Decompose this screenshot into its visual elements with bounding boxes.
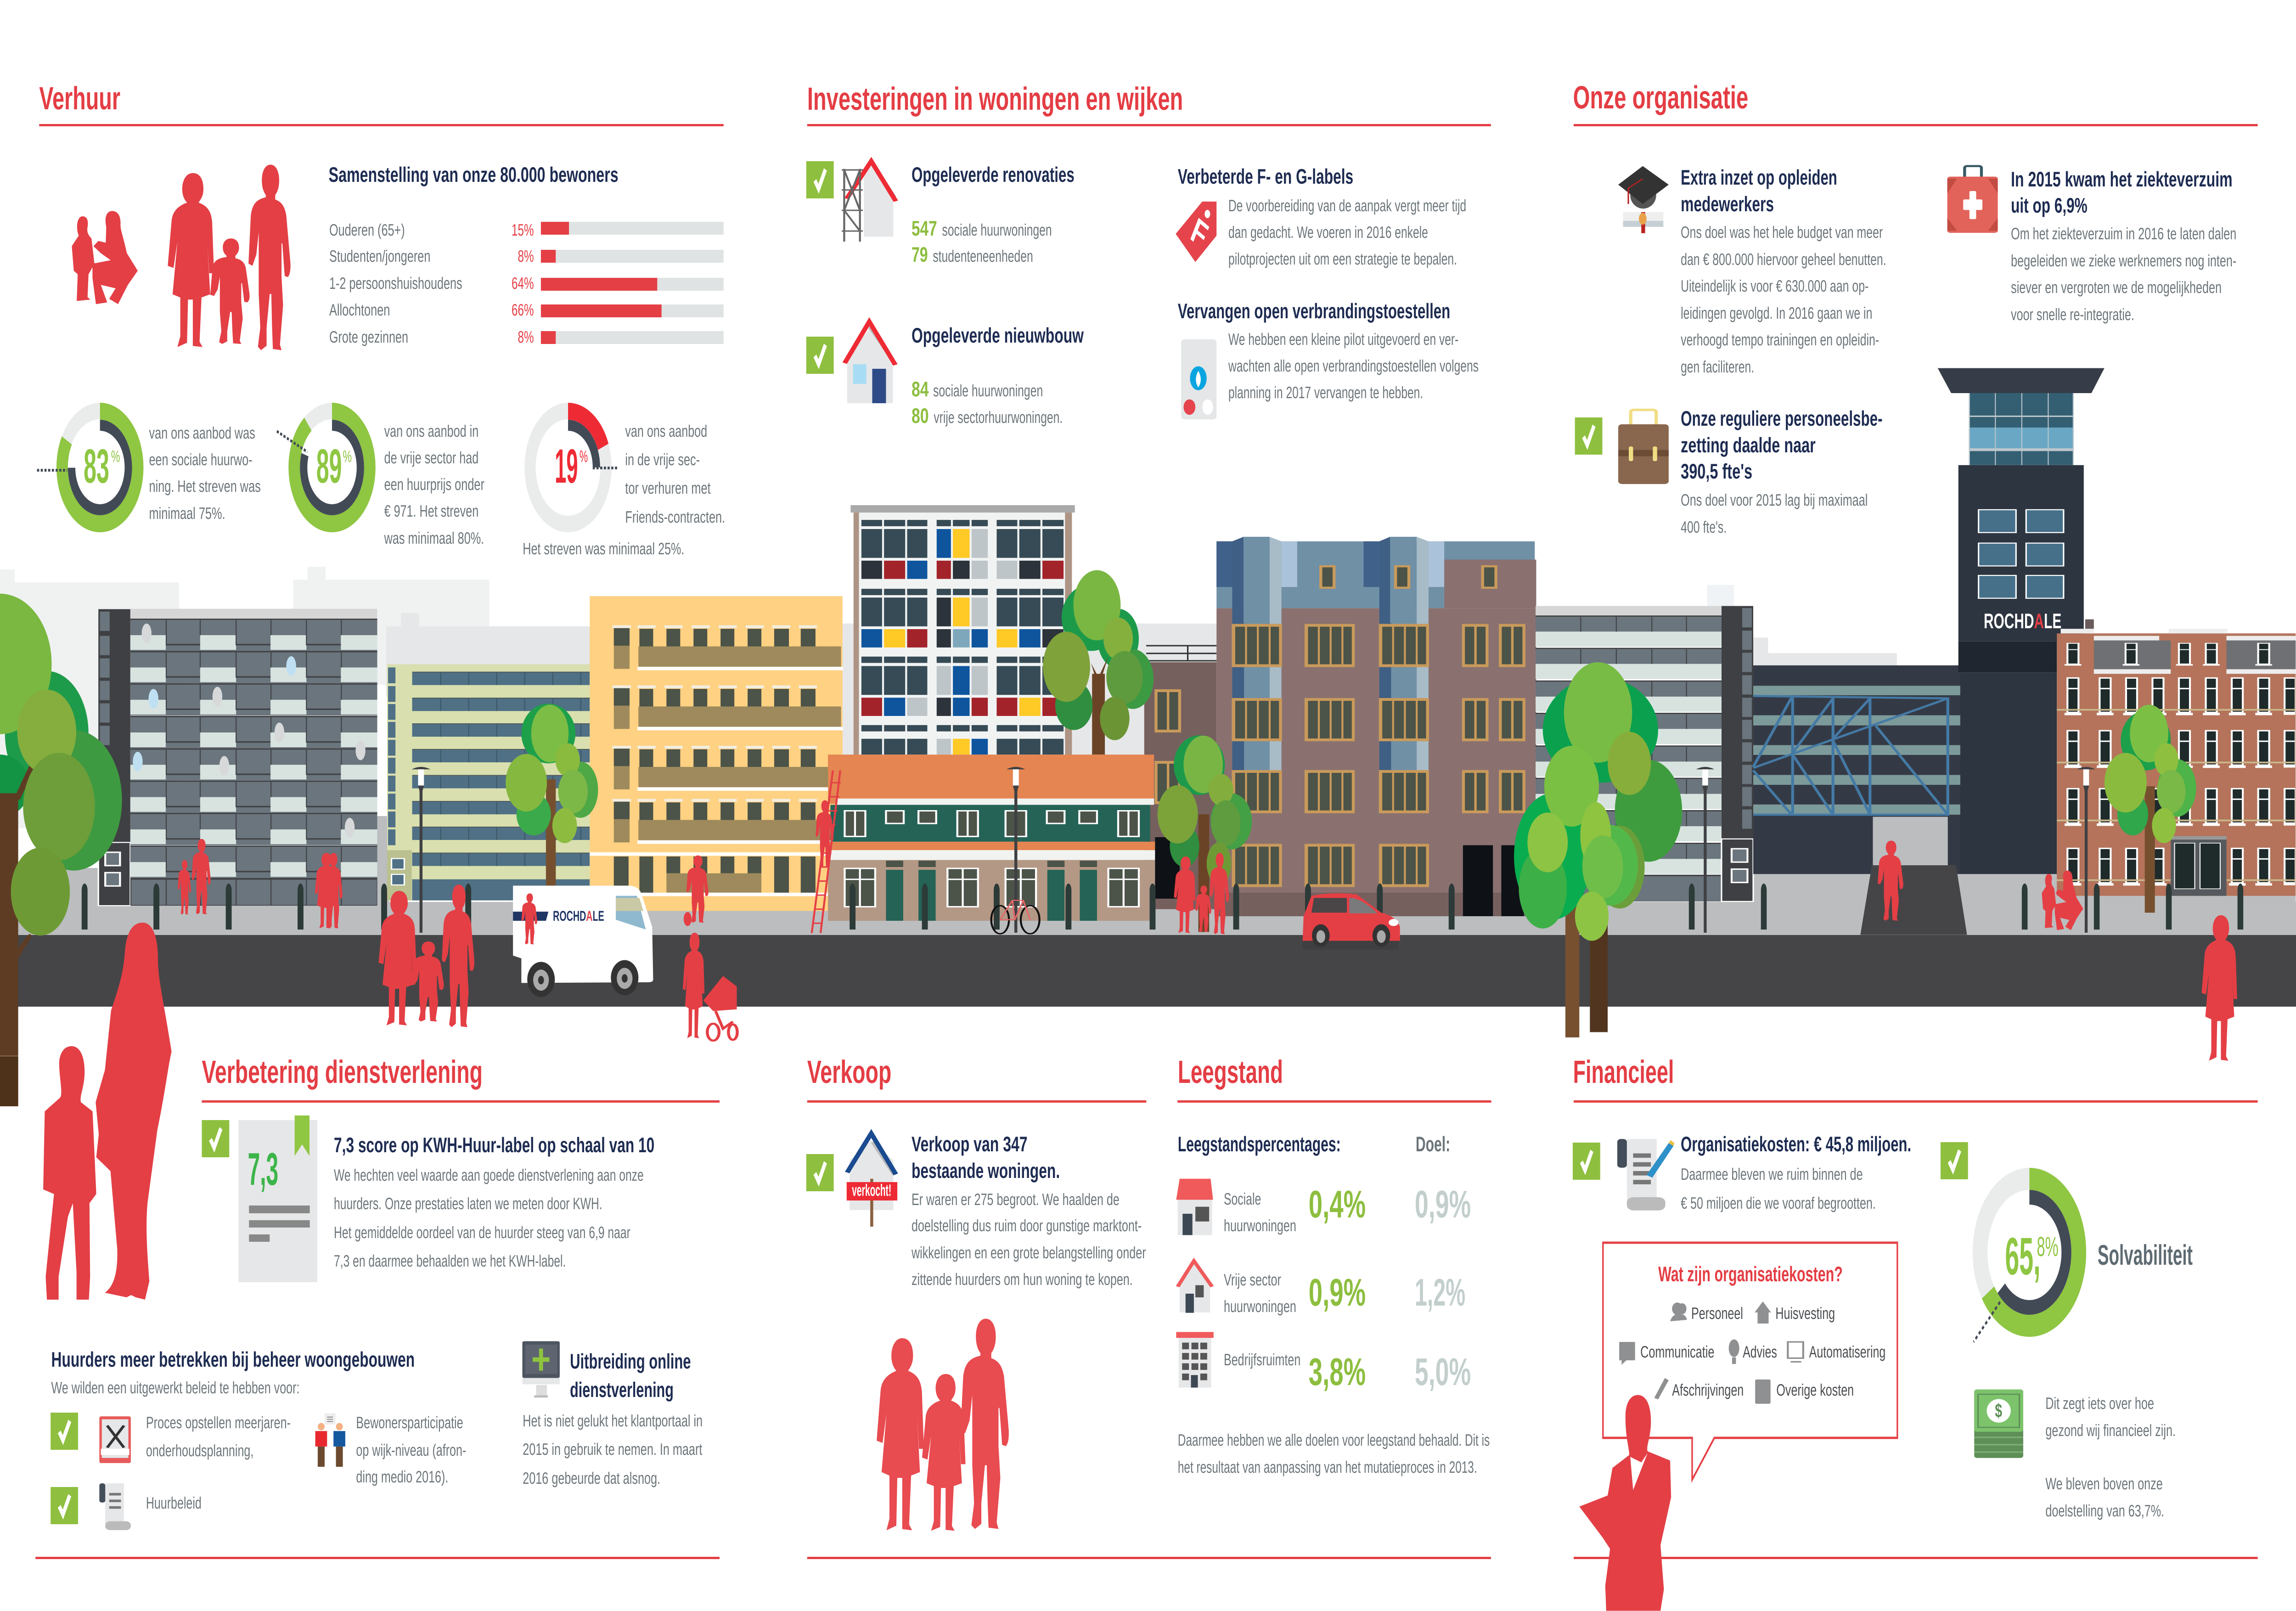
text ziekteverzuim: siever en vergroten we de mogelijkheden	[2011, 278, 2222, 297]
title labels: Verbeterde F- en G-labels	[1178, 164, 1353, 188]
tree: near brick houses	[2105, 705, 2196, 913]
bar chart residents: Studenten/jongeren	[329, 247, 430, 265]
row bedrijfsruimten: 5,0%	[1415, 1350, 1471, 1393]
silhouette family verkoop	[877, 1319, 1009, 1531]
check organisatiekosten	[1573, 1143, 1600, 1180]
donut 19 text: van ons aanbod	[625, 422, 707, 440]
donut 19 text	[523, 422, 725, 558]
donut 19 percent: %	[580, 447, 588, 466]
bar chart residents: 8%	[518, 247, 534, 265]
title personeel: zetting daalde naar	[1681, 433, 1816, 457]
title opleiden	[1681, 165, 1837, 216]
donut 19 text: Friends-contracten.	[625, 507, 725, 526]
check verkoop	[806, 1154, 834, 1191]
row sociale huurwoningen: Sociale	[1224, 1189, 1261, 1208]
donut solvabiliteit: 65,	[2005, 1227, 2041, 1286]
icon: scroll	[99, 1483, 131, 1530]
panel: Investeringen in woningen en wijken	[806, 81, 1491, 428]
text conclusie leegstand: het resultaat van aanpassing van het mutatieproces in 2013.	[1178, 1458, 1477, 1476]
building: brown annex	[1144, 645, 1216, 909]
text personeel: 400 fte's.	[1681, 518, 1727, 536]
bar chart residents	[329, 220, 724, 346]
text vervangen: We hebben een kleine pilot uitgevoerd en ver-	[1228, 330, 1458, 349]
title opleiden: medewerkers	[1681, 192, 1774, 216]
text proces: Proces opstellen meerjaren-	[146, 1413, 291, 1432]
icon: tools book	[99, 1416, 131, 1463]
building: grey flats right	[1536, 606, 1753, 901]
icon: money stack	[1974, 1390, 2023, 1458]
donut 19 percent	[530, 411, 619, 524]
title verkoop	[912, 1132, 1060, 1183]
woman phoning on road	[2202, 915, 2237, 1061]
title personeel	[1681, 406, 1883, 483]
donut 83 text: een sociale huurwo-	[149, 450, 253, 469]
text solvabiliteit	[2045, 1394, 2176, 1520]
people on left pavement	[178, 839, 343, 928]
text ziekteverzuim	[2011, 224, 2236, 324]
title ziekteverzuim: In 2015 kwam het ziekteverzuim	[2011, 167, 2233, 191]
text opleiden: Ons doel was het hele budget van meer	[1681, 223, 1883, 242]
icon: briefcase	[1618, 410, 1669, 484]
street scene	[0, 368, 2296, 1106]
panel: Verbetering dienstverlening	[35, 923, 720, 1559]
donut 19 text: in de vrije sec-	[625, 450, 700, 469]
text online: 2016 gebeurde dat alsnog.	[523, 1469, 660, 1487]
title organisatiekosten: Organisatiekosten: € 45,8 miljoen.	[1681, 1132, 1911, 1156]
icon: scroll and pen	[1617, 1139, 1674, 1211]
row sociale huurwoningen: 0,9%	[1415, 1183, 1471, 1226]
row bedrijfsruimten: 3,8%	[1309, 1350, 1366, 1393]
bar chart residents: Ouderen (65+)	[329, 220, 405, 239]
donut 19 percent: 19	[555, 439, 578, 493]
text vervangen: wachten alle open verbrandingstoestellen volgens	[1228, 356, 1479, 375]
bubble title: Wat zijn organisatiekosten?	[1658, 1262, 1843, 1286]
KWH score card	[238, 1115, 317, 1282]
ladder	[812, 771, 841, 933]
donut 89 percent: 89	[316, 439, 342, 493]
text ziekteverzuim: voor snelle re-integratie.	[2011, 305, 2134, 324]
speech bubble organisatiekosten	[1603, 1243, 1897, 1480]
text KWH	[334, 1166, 644, 1270]
building: yellow flats	[590, 596, 843, 911]
check solvabiliteit	[1941, 1142, 1968, 1179]
donut 89 text	[384, 422, 484, 547]
bar chart residents: 8%	[518, 327, 534, 346]
heading rule	[807, 124, 1491, 126]
check personeel	[1575, 417, 1602, 455]
bar chart residents: Grote gezinnen	[329, 327, 408, 346]
bubble items: Communicatie	[1640, 1342, 1714, 1361]
donut 89 text: € 971. Het streven	[384, 501, 478, 520]
red car	[1303, 893, 1400, 950]
donut 83 text	[149, 423, 261, 523]
icon: F label tag	[1176, 202, 1216, 262]
panel: Onze organisatie	[1573, 79, 2258, 536]
text huurbeleid: Huurbeleid	[146, 1493, 202, 1512]
bar chart residents: 15%	[512, 220, 534, 239]
bottom rule	[807, 1557, 1491, 1559]
tree: near main building	[1158, 735, 1252, 932]
bollards right	[1689, 884, 2243, 929]
bubble items: Advies	[1743, 1342, 1777, 1361]
heading investeringen: Investeringen in woningen en wijken	[807, 81, 1183, 117]
bottom rule	[35, 1557, 720, 1559]
kid with ball	[684, 856, 709, 926]
text ziekteverzuim: begeleiden we zieke werknemers nog inten-	[2011, 251, 2236, 270]
heading organisatie: Onze organisatie	[1573, 79, 1748, 115]
text bewonersparticipatie: op wijk-niveau (afron-	[356, 1441, 466, 1459]
bar chart residents: 66%	[512, 300, 534, 319]
label solvabiliteit: Solvabiliteit	[2098, 1239, 2193, 1271]
check huurbeleid	[51, 1487, 78, 1524]
text opleiden: leidingen gevolgd. In 2016 gaan we in	[1681, 304, 1872, 322]
heading rule	[202, 1100, 720, 1103]
icon: new house	[844, 322, 895, 403]
heading rule	[1574, 1100, 2258, 1103]
title online: Uitbreiding online	[570, 1349, 691, 1373]
text verkoop	[911, 1190, 1146, 1289]
text labels	[1228, 196, 1466, 268]
text opleiden: verhoogd tempo trainingen en opleidin-	[1681, 330, 1879, 349]
text labels: De voorbereiding van de aanpak vergt meer tijd	[1228, 196, 1466, 215]
text solvabiliteit: gezond wij financieel zijn.	[2045, 1421, 2176, 1440]
text opleiden: dan € 800.000 hiervoor geheel benutten.	[1681, 250, 1886, 269]
title composition: Samenstelling van onze 80.000 bewoners	[329, 163, 619, 186]
tree: small near green flats	[506, 704, 598, 886]
text verkoop: zittende huurders om hun woning te kopen.	[912, 1270, 1133, 1289]
text ziekteverzuim: Om het ziekteverzuim in 2016 te laten dalen	[2011, 224, 2236, 243]
text KWH: Het gemiddelde oordeel van de huurder steeg van 6,9 naar	[334, 1223, 630, 1242]
nieuwbouw numbers: vrije sectorhuurwoningen.	[934, 408, 1063, 427]
donut 89 text: de vrije sector had	[384, 448, 478, 467]
title renovaties: Opgeleverde renovaties	[912, 163, 1075, 186]
text conclusie leegstand: Daarmee hebben we alle doelen voor leegstand behaald. Dit is	[1178, 1431, 1490, 1449]
renovaties numbers: sociale huurwoningen	[942, 220, 1052, 239]
row vrije sector	[1224, 1270, 1465, 1316]
title online: dienstverlening	[570, 1378, 674, 1402]
icon: free sector house	[1178, 1261, 1212, 1313]
text proces	[146, 1413, 291, 1460]
text labels: dan gedacht. We voeren in 2016 enkele	[1228, 223, 1428, 242]
red silhouettes of people in the street	[178, 800, 2237, 1061]
heading dienstverlening: Verbetering dienstverlening	[202, 1054, 483, 1090]
check KWH	[202, 1120, 229, 1157]
check proces	[51, 1413, 78, 1450]
renovaties numbers: studenteneenheden	[933, 247, 1033, 265]
title vervangen: Vervangen open verbrandingstoestellen	[1178, 299, 1450, 323]
column title percentages: Leegstandspercentages:	[1178, 1132, 1341, 1156]
title opleiden: Extra inzet op opleiden	[1681, 165, 1837, 189]
bar chart residents: 1-2 persoonshuishoudens	[329, 274, 462, 293]
heading rule	[1177, 1100, 1491, 1103]
person on van side	[522, 893, 537, 944]
title ziekteverzuim: uit op 6,9%	[2011, 193, 2088, 217]
bar chart residents: Allochtonen	[329, 300, 390, 319]
icon: two residents talking	[315, 1414, 345, 1467]
pale background skyline right	[1707, 585, 1897, 667]
bubble items: Huisvesting	[1775, 1304, 1835, 1323]
donut 89 percent: %	[343, 447, 352, 466]
street lamps	[412, 767, 2095, 933]
silhouette business woman	[1579, 1395, 1671, 1611]
icon: scaffolded house	[842, 161, 896, 242]
heading rule	[39, 124, 724, 126]
text KWH: We hechten veel waarde aan goede dienstverlening aan onze	[334, 1166, 644, 1184]
heading leegstand: Leegstand	[1178, 1054, 1283, 1090]
renovaties numbers: 79	[912, 242, 928, 266]
bubble items	[1640, 1304, 1885, 1399]
icon: boiler	[1181, 339, 1216, 419]
building: mondrian flats	[850, 505, 1075, 759]
text KWH: huurders. Onze prestaties laten we meten door KWH.	[334, 1194, 602, 1213]
kneeling pair on right	[2042, 871, 2083, 930]
text conclusie leegstand	[1178, 1431, 1490, 1476]
icon: medical bag	[1947, 166, 1998, 233]
person in driveway	[1878, 841, 1903, 921]
tree: big left foreground	[0, 594, 122, 1056]
row vrije sector: Vrije sector	[1224, 1270, 1281, 1289]
panel: Verkoop	[806, 1054, 1491, 1559]
title nieuwbouw: Opgeleverde nieuwbouw	[912, 323, 1084, 347]
donut 89 text: een huurprijs onder	[384, 475, 484, 494]
family by tree	[1174, 853, 1229, 934]
heading rule	[1574, 124, 2258, 126]
text verkoop: Er waren er 275 begroot. We haalden de	[912, 1190, 1120, 1209]
text online	[523, 1411, 703, 1487]
text online: 2015 in gebruik te nemen. In maart	[523, 1440, 702, 1459]
text proces: onderhoudsplanning,	[146, 1441, 253, 1460]
row sociale huurwoningen: huurwoningen	[1224, 1216, 1296, 1235]
donut 19 text: Het streven was minimaal 25%.	[523, 539, 684, 558]
icon: graduation cap	[1618, 166, 1669, 233]
title online	[570, 1349, 691, 1402]
icon: sold house	[847, 1133, 897, 1227]
donut 83 percent	[37, 411, 138, 524]
title verkoop: bestaande woningen.	[912, 1159, 1060, 1183]
donut 83 percent: 83	[84, 439, 109, 493]
bubble items: Overige kosten	[1776, 1380, 1854, 1399]
donut 83 text: ning. Het streven was	[149, 477, 261, 496]
text solvabiliteit: We bleven boven onze	[2045, 1474, 2163, 1493]
text online: Het is niet gelukt het klantportaal in	[523, 1411, 703, 1430]
title personeel: Onze reguliere personeelsbe-	[1681, 406, 1883, 430]
heading Verhuur: Verhuur	[39, 80, 120, 116]
text solvabiliteit: Dit zegt iets over hoe	[2045, 1394, 2154, 1413]
pale background skyline left	[0, 567, 601, 828]
bubble items: Automatisering	[1809, 1342, 1885, 1361]
donut 83 text: van ons aanbod was	[149, 423, 255, 442]
donut 19 text: tor verhuren met	[625, 479, 711, 497]
intro huurders: We wilden een uitgewerkt beleid te hebben voor:	[51, 1378, 299, 1397]
panel: Financieel	[1573, 1054, 2258, 1611]
text labels: pilotprojecten uit om een strategie te bepalen.	[1228, 249, 1457, 268]
tree: large pair centre right	[1514, 662, 1682, 1037]
check renovaties	[806, 161, 834, 198]
tree behind low houses	[1043, 570, 1154, 755]
tower logo text: ROCHDALE	[1984, 609, 2061, 633]
renovaties numbers	[912, 216, 1052, 266]
text bewonersparticipatie: Bewonersparticipatie	[356, 1413, 463, 1432]
silhouette family	[72, 165, 291, 350]
check nieuwbouw	[806, 337, 834, 374]
heading rule	[807, 1100, 1146, 1103]
nieuwbouw numbers: sociale huurwoningen	[933, 381, 1043, 400]
row vrije sector: huurwoningen	[1224, 1297, 1296, 1316]
icon: F label tag: F	[1187, 210, 1213, 256]
donut 89 text: was minimaal 80%.	[384, 529, 484, 547]
row sociale huurwoningen: 0,4%	[1309, 1183, 1366, 1226]
text verkoop: doelstelling dus ruim door gunstige marktont-	[912, 1216, 1142, 1235]
nieuwbouw numbers: 80	[912, 404, 929, 428]
row sociale huurwoningen	[1224, 1183, 1471, 1235]
column title doel: Doel:	[1416, 1132, 1450, 1156]
icon: computer monitor	[523, 1341, 560, 1397]
building: light green flats	[387, 665, 590, 901]
bollards centre	[850, 884, 1455, 929]
van logo text: ROCHDALE	[553, 908, 604, 924]
nieuwbouw numbers: 84	[912, 377, 929, 401]
left trunk base	[0, 1056, 18, 1106]
road	[0, 935, 2296, 1007]
sidewalk	[0, 816, 2296, 935]
icon: office building	[1176, 1332, 1214, 1388]
title verkoop: Verkoop van 347	[912, 1132, 1028, 1156]
text bewonersparticipatie	[356, 1413, 466, 1486]
row bedrijfsruimten	[1224, 1350, 1471, 1393]
heading verkoop: Verkoop	[807, 1054, 891, 1090]
text verkoop: wikkelingen en een grote belangstelling onder	[911, 1243, 1146, 1262]
heading financieel: Financieel	[1573, 1054, 1674, 1090]
KWH score card: 7,3	[248, 1143, 278, 1195]
text organisatiekosten: € 50 miljoen die we vooraf begrootten.	[1681, 1194, 1876, 1212]
nieuwbouw numbers	[912, 377, 1063, 428]
donut 89 text: van ons aanbod in	[384, 422, 478, 440]
title personeel: 390,5 fte's	[1681, 459, 1752, 483]
panel: Leegstand	[1176, 1054, 1491, 1476]
bubble items: Personeel	[1691, 1304, 1743, 1323]
bubble icons	[1619, 1301, 1803, 1404]
donut 83 text: minimaal 75%.	[149, 504, 225, 523]
text personeel: Ons doel voor 2015 lag bij maximaal	[1681, 490, 1868, 509]
silhouette mother and child	[43, 923, 172, 1300]
text opleiden: gen faciliteren.	[1681, 357, 1754, 376]
title KWH: 7,3 score op KWH-Huur-label op schaal van 10	[334, 1133, 654, 1157]
family on road	[379, 884, 474, 1027]
bottom rule	[1574, 1557, 2258, 1559]
sign verkocht: verkocht!	[852, 1181, 891, 1200]
text organisatiekosten: Daarmee bleven we ruim binnen de	[1681, 1165, 1863, 1183]
row bedrijfsruimten: Bedrijfsruimten	[1224, 1350, 1300, 1369]
building: main brown building with blue roof	[1216, 537, 1536, 916]
title huurders: Huurders meer betrekken bij beheer woongebouwen	[51, 1347, 415, 1371]
donut solvabiliteit	[1974, 1179, 2079, 1342]
row vrije sector: 0,9%	[1309, 1271, 1366, 1314]
parent with pram	[683, 933, 737, 1041]
delivery van	[513, 885, 653, 997]
building: grey flats left	[98, 609, 377, 906]
text vervangen: planning in 2017 vervangen te hebben.	[1228, 383, 1423, 402]
text bewonersparticipatie: ding medio 2016).	[356, 1467, 448, 1486]
text vervangen	[1228, 330, 1479, 402]
title ziekteverzuim	[2011, 167, 2233, 217]
text organisatiekosten	[1681, 1165, 1876, 1212]
low row houses	[828, 755, 1155, 921]
donut 83 percent: %	[111, 447, 120, 466]
text opleiden	[1681, 223, 1886, 376]
panel: Verhuur	[37, 80, 725, 558]
bar chart residents: 64%	[512, 274, 534, 293]
text opleiden: Uiteindelijk is voor € 630.000 aan op-	[1681, 276, 1868, 295]
bubble items: Afschrijvingen	[1672, 1380, 1744, 1399]
renovaties numbers: 547	[912, 216, 937, 240]
bicycle	[991, 901, 1040, 934]
icon dollar sign: $	[1995, 1400, 2002, 1421]
donut 89 percent	[277, 411, 370, 524]
rochdale office tower with glass truss	[1753, 368, 2105, 935]
bollards left	[82, 884, 471, 929]
person on ladder	[816, 800, 833, 867]
text solvabiliteit: doelstelling van 63,7%.	[2045, 1501, 2164, 1520]
text KWH: 7,3 en daarmee behaalden we het KWH-label.	[334, 1251, 566, 1270]
pale background skyline centre	[821, 624, 1224, 764]
building: red brick houses	[2057, 620, 2296, 896]
text personeel	[1681, 490, 1868, 536]
icon: social house	[1176, 1179, 1213, 1235]
row vrije sector: 1,2%	[1415, 1271, 1465, 1314]
donut solvabiliteit: 8%	[2037, 1231, 2059, 1262]
